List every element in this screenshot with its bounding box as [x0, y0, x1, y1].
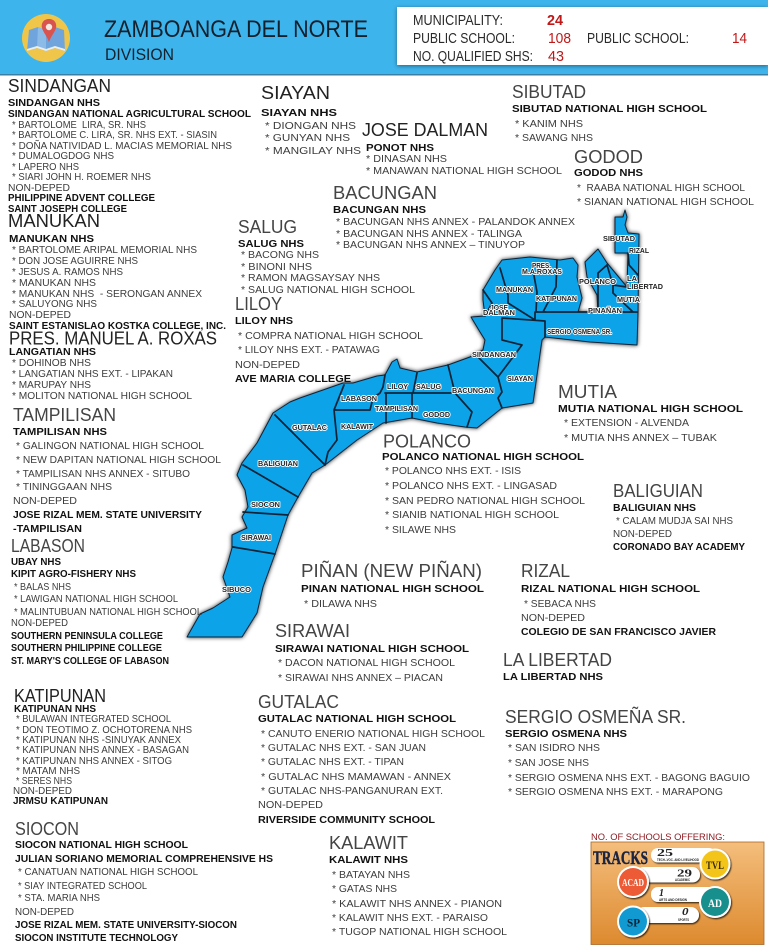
school list: Siocon — [15, 839, 273, 944]
stats panel: 14 — [732, 31, 747, 47]
heading: Labason: LABASON — [11, 535, 85, 556]
track: TVL: TVL — [706, 858, 724, 872]
track: SP: SPORTS — [678, 918, 689, 922]
school list: Bacungan: BACUNGAN NHS — [333, 204, 426, 216]
school list: Jose Dalman: PONOT NHS — [366, 142, 434, 154]
school list: Sindangan: SINDANGAN NATIONAL AGRICULTURAL SCHOOL — [8, 108, 252, 120]
school list: Mutia: MUTIA NATIONAL HIGH SCHOOL — [558, 403, 744, 415]
panel: Godod — [574, 146, 754, 208]
tracks background — [591, 842, 764, 944]
school list: Sergio Osmeña Sr.: * SAN JOSE NHS — [508, 757, 589, 769]
school list: Baliguian — [613, 502, 745, 553]
school list: Tampilisan: -TAMPILISAN — [13, 523, 82, 535]
map labels: LABASON — [341, 394, 377, 403]
school list: Siayan: * DIONGAN NHS — [265, 120, 356, 132]
school list: Bacungan: * BACUNGAN NHS ANNEX - PALANDOK ANNEX — [336, 216, 575, 228]
school list: Siocon: SIOCON NATIONAL HIGH SCHOOL — [15, 839, 189, 851]
school list: Liloy — [235, 315, 423, 385]
panel: Sindangan — [8, 75, 252, 215]
school list: Polanco: POLANCO NATIONAL HIGH SCHOOL — [382, 451, 585, 463]
heading: Tampilisan: TAMPILISAN — [13, 404, 116, 425]
school list: Mutia: * EXTENSION - ALVENDA — [564, 417, 689, 429]
track: SP: 0 — [682, 906, 689, 918]
school list: Kalawit: * GATAS NHS — [332, 883, 397, 895]
school list: Liloy: * COMPRA NATIONAL HIGH SCHOOL — [238, 330, 423, 342]
school list: Katipunan: * KATIPUNAN NHS -SINUYAK ANNEX — [16, 734, 181, 746]
school list: Polanco: * POLANCO NHS EXT. - ISIS — [385, 465, 521, 477]
school list: Siayan — [261, 107, 361, 157]
title: ZAMBOANGA DEL NORTE — [104, 16, 368, 43]
header banner — [0, 0, 768, 76]
school list: Roxas: * LANGATIAN NHS EXT. - LIPAKAN — [12, 368, 173, 380]
school list: Salug: * RAMON MAGSAYSAY NHS — [241, 272, 380, 284]
school list: Sindangan: * SIARI JOHN H. ROEMER NHS — [12, 171, 151, 183]
map labels: KATIPUNAN — [536, 294, 577, 303]
school list: Polanco: * SILAWE NHS — [385, 524, 456, 536]
school list: Sindangan: PHILIPPINE ADVENT COLLEGE — [8, 192, 155, 204]
panel: Salug — [238, 216, 415, 296]
heading: Baliguian: BALIGUIAN — [613, 480, 703, 501]
school list: Manukan: * BARTOLOME ARIPAL MEMORIAL NHS — [12, 244, 197, 256]
panel: Sibutad — [512, 81, 708, 144]
map labels: SIRAWAI — [241, 533, 271, 542]
map labels: BALIGUIAN — [258, 459, 298, 468]
map labels: M.A.ROXAS — [522, 267, 562, 276]
school list: Labason: ST. MARY'S COLLEGE OF LABASON — [11, 655, 169, 667]
school list: Roxas: * DOHINOB NHS — [12, 357, 91, 369]
stats panel: NO. QUALIFIED SHS: — [413, 49, 533, 65]
school list: Piñan: * DILAWA NHS — [304, 598, 377, 610]
panel: Rizal — [521, 560, 716, 638]
school list: Manukan: MANUKAN NHS — [9, 233, 94, 245]
heading: Siocon: SIOCON — [15, 818, 79, 839]
school list: Katipunan: * DON TEOTIMO Z. OCHOTORENA NHS — [16, 724, 192, 736]
school list: Manukan — [9, 233, 226, 332]
panel: Labason — [11, 535, 202, 667]
panel: Polanco — [382, 430, 585, 536]
school list: Katipunan: * BULAWAN INTEGRATED SCHOOL — [16, 713, 171, 725]
map labels: JOSE — [490, 303, 508, 312]
school list: Manukan: * MANUKAN NHS — [12, 277, 96, 289]
school list: Liloy: * LILOY NHS EXT. - PATAWAG — [238, 344, 380, 356]
school list: La Libertad: LA LIBERTAD NHS — [503, 671, 603, 683]
track: AD: AD — [708, 896, 722, 910]
heading: Pres. Manuel A. Roxas: PRES. MANUEL A. ROXAS — [9, 328, 217, 348]
school list: Tampilisan — [13, 426, 221, 535]
panel: La Libertad — [503, 649, 612, 683]
school list: Jose Dalman — [366, 142, 562, 177]
map labels: MANUKAN — [496, 285, 533, 294]
heading: Bacungan: BACUNGAN — [333, 182, 437, 203]
school list: Sibutad: * SAWANG NHS — [515, 132, 593, 144]
icon: map with pin — [22, 14, 70, 62]
heading: Sibutad: SIBUTAD — [512, 81, 586, 102]
school list: Sirawai: * DACON NATIONAL HIGH SCHOOL — [278, 657, 455, 669]
heading: Sirawai: SIRAWAI — [275, 620, 350, 641]
school list: Siocon: JULIAN SORIANO MEMORIAL COMPREHENSIVE HS — [15, 853, 273, 865]
map labels: LIBERTAD — [627, 282, 663, 291]
school list: Sindangan: NON-DEPED — [8, 182, 70, 194]
school list: Salug: * BINONI NHS — [241, 261, 312, 273]
school list: Roxas: * MARUPAY NHS — [12, 379, 91, 391]
school list: Sindangan: * BARTOLOME C. LIRA, SR. NHS EXT. - SIASIN — [12, 129, 217, 141]
school list: Salug: * SALUG NATIONAL HIGH SCHOOL — [241, 284, 415, 296]
school list: Mutia: * MUTIA NHS ANNEX – TUBAK — [564, 432, 717, 444]
school list: Siocon: SIOCON INSTITUTE TECHNOLOGY — [15, 932, 178, 944]
heading: Sindangan: SINDANGAN — [8, 75, 111, 96]
track: ACAD — [617, 866, 700, 898]
school list: Tampilisan: TAMPILISAN NHS — [13, 426, 107, 438]
school list: Tampilisan: * TAMPILISAN NHS ANNEX - SITUBO — [16, 468, 190, 480]
track: SP — [617, 906, 699, 938]
school list: Katipunan: KATIPUNAN NHS — [14, 703, 96, 715]
school list: Rizal: * SEBACA NHS — [524, 598, 596, 610]
school list: Sirawai: SIRAWAI NATIONAL HIGH SCHOOL — [275, 643, 470, 655]
school list: Manukan: SAINT ESTANISLAO KOSTKA COLLEGE, INC. — [9, 320, 226, 332]
school list: Sergio Osmeña Sr. — [505, 728, 750, 798]
stats panel: PUBLIC SCHOOL: — [413, 31, 515, 47]
school list: Godod: * SIANAN NATIONAL HIGH SCHOOL — [577, 196, 754, 208]
school list: Kalawit: * TUGOP NATIONAL HIGH SCHOOL — [332, 926, 507, 938]
school list: Gutalac: * GUTALAC NHS EXT. - TIPAN — [261, 756, 404, 768]
school list: Polanco — [382, 451, 585, 536]
school list: Sibutad: SIBUTAD NATIONAL HIGH SCHOOL — [512, 103, 708, 115]
school list: Siayan: * GUNYAN NHS — [265, 132, 350, 144]
school list: Godod: * RAABA NATIONAL HIGH SCHOOL — [577, 182, 745, 194]
map labels: GUTALAC — [292, 423, 327, 432]
school list: Siayan: SIAYAN NHS — [261, 107, 337, 119]
school list: Tampilisan: * TININGGAAN NHS — [16, 481, 112, 493]
school list: Baliguian: NON-DEPED — [613, 528, 672, 540]
school list: Baliguian: CORONADO BAY ACADEMY — [613, 541, 745, 553]
school list: Sirawai — [275, 643, 470, 684]
school list: Piñan — [301, 583, 485, 610]
school list: Roxas: * MOLITON NATIONAL HIGH SCHOOL — [12, 390, 192, 402]
tracks heading: TRACKS — [593, 848, 648, 869]
panel: Baliguian — [613, 480, 745, 553]
school list: Godod: GODOD NHS — [574, 167, 643, 179]
school list: Labason: * BALAS NHS — [14, 581, 71, 593]
heading: Salug: SALUG — [238, 216, 297, 237]
school list: Siocon: * CANATUAN NATIONAL HIGH SCHOOL — [18, 866, 198, 878]
school list: Siayan: * MANGILAY NHS — [265, 145, 361, 157]
school list: Siocon: * STA. MARIA NHS — [18, 892, 100, 904]
school list: Rizal: NON-DEPED — [521, 612, 585, 624]
school list: Siocon: * SIAY INTEGRATED SCHOOL — [18, 880, 147, 892]
school list: Manukan: * JESUS A. RAMOS NHS — [12, 266, 123, 278]
track: TVL: 25 — [657, 847, 674, 859]
school list: Labason: UBAY NHS — [11, 556, 61, 568]
panel: Pres. Manuel A. Roxas — [9, 328, 217, 402]
school list: Baliguian: * CALAM MUDJA SAI NHS — [616, 515, 733, 527]
school list: Jose Dalman: * MANAWAN NATIONAL HIGH SCHOOL — [366, 165, 562, 177]
map labels: SINDANGAN — [472, 350, 516, 359]
panel: Katipunan — [13, 685, 192, 807]
heading: Katipunan: KATIPUNAN — [14, 685, 106, 706]
stats panel — [397, 7, 768, 65]
map labels: LILOY — [387, 382, 408, 391]
school list: Gutalac: * GUTALAC NHS EXT. - SAN JUAN — [261, 742, 426, 754]
panel: Siocon — [15, 818, 273, 944]
panel: Siayan — [261, 82, 361, 157]
school list: Jose Dalman: * DINASAN NHS — [366, 153, 447, 165]
heading: Jose Dalman: JOSE DALMAN — [362, 119, 488, 140]
map labels: RIZAL — [629, 246, 650, 255]
panel: Bacungan — [333, 182, 575, 251]
school list: Katipunan: * KATIPUNAN NHS ANNEX - SITOG — [16, 755, 172, 767]
school list: Labason: KIPIT AGRO-FISHERY NHS — [11, 568, 136, 580]
school list: Sergio Osmeña Sr.: SERGIO OSMENA NHS — [505, 728, 627, 740]
school list: Sibutad: * KANIM NHS — [515, 118, 583, 130]
heading: Siayan: SIAYAN — [261, 82, 330, 103]
map labels: LA — [627, 274, 637, 283]
school list: Labason: SOUTHERN PHILIPPINE COLLEGE — [11, 642, 162, 654]
heading: Sergio Osmeña Sr.: SERGIO OSMEÑA SR. — [505, 706, 686, 727]
map labels: PINAÑAN — [588, 306, 622, 315]
stats panel: 108 — [548, 31, 571, 47]
track: AD: 1 — [659, 887, 664, 899]
school list: Liloy: AVE MARIA COLLEGE — [235, 373, 351, 385]
map labels: BACUNGAN — [452, 386, 494, 395]
heading: Manukan: MANUKAN — [8, 210, 100, 231]
school list: Sindangan: * DOÑA NATIVIDAD L. MACIAS MEMORIAL NHS — [12, 139, 232, 152]
school list: Sindangan: * BARTOLOME LIRA, SR. NHS — [12, 119, 146, 131]
school list: Katipunan: NON-DEPED — [13, 785, 72, 797]
school list: Roxas — [9, 346, 192, 402]
school list: Gutalac: GUTALAC NATIONAL HIGH SCHOOL — [258, 713, 457, 725]
heading: Kalawit: KALAWIT — [329, 832, 408, 853]
school list: Kalawit: * KALAWIT NHS EXT. - PARAISO — [332, 912, 488, 924]
map labels: SIAYAN — [507, 374, 533, 383]
school list: Labason — [11, 556, 202, 667]
school list: Gutalac: * GUTALAC NHS-PANGANURAN EXT. — [261, 785, 443, 797]
school list: Tampilisan: * GALINGON NATIONAL HIGH SCHOOL — [16, 440, 204, 452]
heading: La Libertad: LA LIBERTAD — [503, 649, 612, 670]
school list: Bacungan: * BACUNGAN NHS ANNEX - TALINGA — [336, 228, 522, 240]
school list: Sibutad — [512, 103, 708, 144]
school list: Kalawit — [329, 854, 507, 938]
stats panel: PUBLIC SCHOOL: — [587, 31, 689, 47]
school list: Sindangan: * LAPERO NHS — [12, 161, 79, 173]
school list: Sindangan: * DUMALOGDOG NHS — [12, 150, 114, 162]
school list: Polanco: * SIANIB NATIONAL HIGH SCHOOL — [385, 509, 559, 521]
map labels: SERGIO OSMENA SR. — [547, 327, 612, 336]
school list: Katipunan: * KATIPUNAN NHS ANNEX - BASAGAN — [16, 744, 189, 756]
school list: Bacungan: * BACUNGAN NHS ANNEX – TINUYOP — [336, 239, 525, 251]
school list: Kalawit: * KALAWIT NHS ANNEX - PIANON — [332, 898, 502, 910]
subtitle: DIVISION — [105, 45, 174, 64]
panel: Liloy — [235, 293, 423, 385]
track: TVL: TECH.-VOC. AND LIVELIHOOD — [657, 858, 699, 862]
school list: Labason: * MALINTUBUAN NATIONAL HIGH SCHOOL — [14, 606, 202, 618]
school list: Mutia — [558, 403, 744, 444]
school list: Gutalac: * CANUTO ENERIO NATIONAL HIGH SCHOOL — [261, 728, 485, 740]
school list: Godod — [574, 167, 754, 208]
track: ACAD: ACADEMIC — [675, 878, 690, 882]
school list: Manukan: * DON JOSE AGUIRRE NHS — [12, 255, 138, 267]
school list: Katipunan — [13, 703, 192, 807]
school list: Labason: NON-DEPED — [11, 617, 68, 629]
panel: Manukan — [8, 210, 226, 332]
heading: Piñan: PIÑAN (NEW PIÑAN) — [301, 560, 482, 581]
school list: Gutalac: RIVERSIDE COMMUNITY SCHOOL — [258, 814, 436, 826]
map labels: PRES. — [532, 261, 551, 270]
map labels: GODOD — [423, 410, 450, 419]
stats panel: 24 — [547, 13, 563, 29]
panel: Piñan — [301, 560, 485, 610]
tracks caption: NO. OF SCHOOLS OFFERING: — [591, 832, 725, 843]
heading: Godod: GODOD — [574, 146, 643, 167]
map labels: SALUG — [416, 382, 441, 391]
school list: Tampilisan: * NEW DAPITAN NATIONAL HIGH SCHOOL — [16, 454, 221, 466]
track: TVL — [651, 847, 730, 880]
panel: Sirawai — [275, 620, 470, 684]
school list: Gutalac: * GUTALAC NHS MAMAWAN - ANNEX — [261, 771, 451, 783]
school list: Tampilisan: JOSE RIZAL MEM. STATE UNIVERSITY — [13, 509, 202, 521]
school list: Sirawai: * SIRAWAI NHS ANNEX – PIACAN — [278, 672, 443, 684]
school list: Salug: * BACONG NHS — [241, 249, 319, 261]
school list: Bacungan — [333, 204, 575, 251]
school list: Katipunan: * MATAM NHS — [16, 765, 80, 777]
school list: Sergio Osmeña Sr.: * SAN ISIDRO NHS — [508, 742, 600, 754]
map labels: SIBUTAD — [603, 234, 635, 243]
panel: Tampilisan — [13, 404, 221, 535]
heading: Rizal: RIZAL — [521, 560, 570, 581]
stats panel: 43 — [548, 49, 564, 65]
school list: Kalawit: KALAWIT NHS — [329, 854, 408, 866]
school list: Salug — [238, 238, 415, 296]
school list: Sergio Osmeña Sr.: * SERGIO OSMENA NHS EXT. - MARAPONG — [508, 786, 723, 798]
school list: Katipunan: JRMSU KATIPUNAN — [13, 795, 108, 807]
school list: Piñan: PINAN NATIONAL HIGH SCHOOL — [301, 583, 485, 595]
school list: Roxas: LANGATIAN NHS — [9, 346, 96, 358]
panel: Kalawit — [329, 832, 507, 938]
school list: Baliguian: BALIGUIAN NHS — [613, 502, 696, 514]
school list: Tampilisan: NON-DEPED — [13, 495, 77, 507]
map labels — [222, 234, 663, 594]
school list: Sindangan — [8, 97, 252, 215]
school list: Manukan: * MANUKAN NHS - SERONGAN ANNEX — [12, 288, 202, 300]
heading: Mutia: MUTIA — [558, 381, 618, 402]
map labels: MUTIA — [617, 295, 640, 304]
map of Zamboanga del Norte — [187, 210, 663, 637]
heading: Gutalac: GUTALAC — [258, 691, 339, 712]
heading: Liloy: LILOY — [235, 293, 282, 314]
track: ACAD: 29 — [677, 868, 693, 880]
track: AD — [651, 886, 731, 918]
school list: Rizal: RIZAL NATIONAL HIGH SCHOOL — [521, 583, 701, 595]
school list: Rizal — [521, 583, 716, 638]
map labels: POLANCO — [579, 277, 616, 286]
school list: Sergio Osmeña Sr.: * SERGIO OSMENA NHS EXT. - BAGONG BAGUIO — [508, 772, 750, 784]
school list: Manukan: NON-DEPED — [9, 309, 71, 321]
school list: Labason: SOUTHERN PENINSULA COLLEGE — [11, 630, 163, 642]
school list: Kalawit: * BATAYAN NHS — [332, 869, 410, 881]
track: SP: SP — [627, 916, 640, 930]
panel: Mutia — [558, 381, 744, 444]
panel: Jose Dalman — [362, 119, 562, 177]
school list: Polanco: * POLANCO NHS EXT. - LINGASAD — [385, 480, 557, 492]
school list: Salug: SALUG NHS — [238, 238, 304, 250]
stats panel: MUNICIPALITY: — [413, 13, 503, 29]
track: ACAD: ACAD — [622, 878, 644, 889]
school list: Manukan: * SALUYONG NHS — [12, 298, 97, 310]
school list: Liloy: LILOY NHS — [235, 315, 293, 327]
panel: Gutalac — [258, 691, 485, 826]
school list: Sindangan: SAINT JOSEPH COLLEGE — [8, 203, 127, 215]
school list: Labason: * LAWIGAN NATIONAL HIGH SCHOOL — [14, 593, 178, 605]
school list: Rizal: COLEGIO DE SAN FRANCISCO JAVIER — [521, 626, 716, 638]
school list: Polanco: * SAN PEDRO NATIONAL HIGH SCHOOL — [385, 495, 585, 507]
school list: Siocon: NON-DEPED — [15, 906, 74, 918]
map labels: KALAWIT — [341, 422, 374, 431]
school list: Liloy: NON-DEPED — [235, 359, 300, 371]
map labels: SIOCON — [251, 500, 280, 509]
map labels: TAMPILISAN — [375, 404, 418, 413]
map labels: SIBUCO — [222, 585, 251, 594]
panel: Sergio Osmeña Sr. — [505, 706, 750, 798]
map labels: DALMAN — [483, 308, 515, 317]
school list: Gutalac: NON-DEPED — [258, 799, 323, 811]
school list: Katipunan: * SERES NHS — [16, 775, 72, 787]
heading: Polanco: POLANCO — [383, 430, 471, 452]
school list: Gutalac — [258, 713, 485, 826]
panel: tracks — [591, 832, 764, 944]
track: AD: ARTS AND DESIGN — [659, 898, 687, 902]
school list: Siocon: JOSE RIZAL MEM. STATE UNIVERSITY-SIOCON — [15, 919, 237, 931]
school list: Sindangan: SINDANGAN NHS — [8, 97, 100, 109]
